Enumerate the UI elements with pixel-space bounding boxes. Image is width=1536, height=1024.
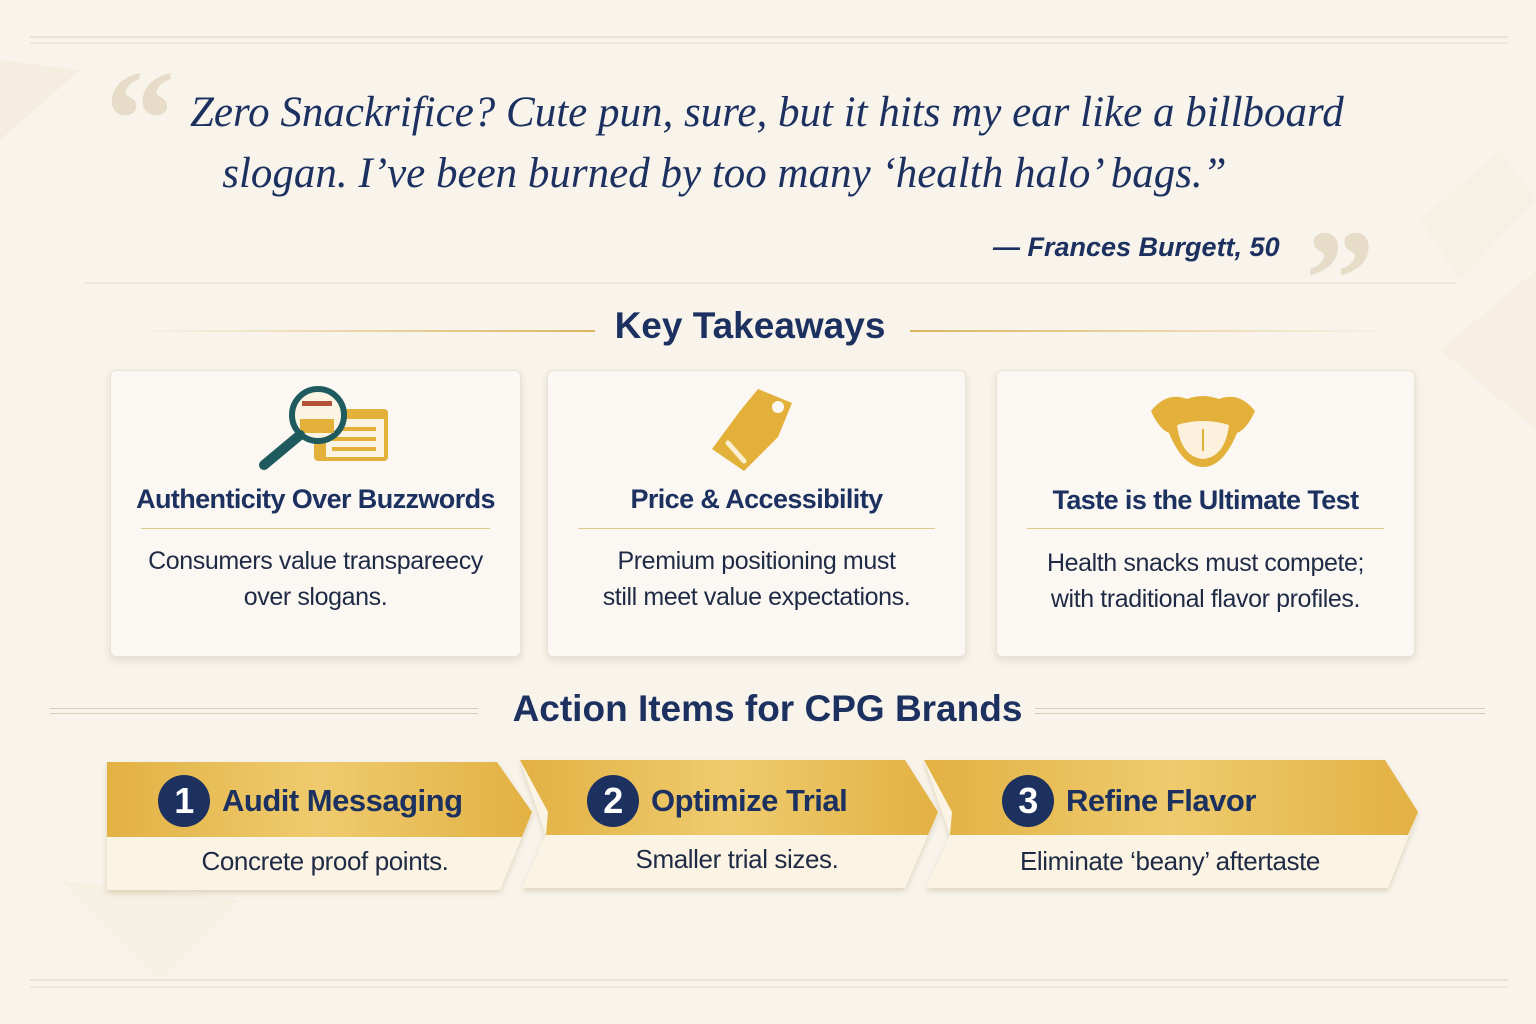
action 3: Refine Flavor: [1066, 783, 1256, 818]
heading: Key Takeaways: Key Takeaways: [615, 305, 885, 346]
heading: Action Items for CPG Brands: Action Items for CPG Brands: [513, 688, 1022, 729]
attribution: — Frances Burgett, 50: [993, 232, 1280, 262]
panel: Price & Accessibility: still meet value expectations.: [603, 583, 910, 611]
action 2: [587, 775, 847, 827]
quote text: Zero Snackrifice? Cute pun, sure, but it hits my ear like a billboard: [190, 89, 1344, 136]
quote text: slogan. I’ve been burned by too many ‘health halo’ bags.”: [222, 150, 1227, 197]
panel: Authenticity Over Buzzwords: Authenticity Over Buzzwords: [136, 484, 495, 514]
icon: magnifier over document: [259, 386, 388, 470]
icon: mouth with tongue: [1151, 396, 1255, 467]
panel: Price & Accessibility: [547, 370, 966, 657]
panel: Price & Accessibility: Premium positioning must: [617, 547, 896, 575]
action 3: [1002, 775, 1256, 827]
action arrows: Smaller trial sizes.: [636, 844, 838, 874]
panel: Taste is the Ultimate Test: Health snacks must compete;: [1047, 549, 1364, 577]
icon: price tag: [712, 389, 792, 471]
panel: Taste is the Ultimate Test: Taste is the Ultimate Test: [1052, 485, 1358, 515]
panel: Authenticity Over Buzzwords: Consumers value transpareecy: [148, 547, 483, 575]
panel: Authenticity Over Buzzwords: [110, 370, 521, 657]
action 3: 3: [1018, 780, 1038, 821]
quote block: [105, 42, 1375, 357]
action 2: Optimize Trial: [651, 783, 847, 818]
icon: open quote mark: “: [105, 42, 175, 197]
panel: Taste is the Ultimate Test: with traditional flavor profiles.: [1051, 585, 1360, 613]
icon: close quote mark: ”: [1305, 202, 1375, 357]
action arrows: Concrete proof points.: [201, 846, 448, 876]
panel: Authenticity Over Buzzwords: over slogans.: [244, 583, 387, 611]
action 1: 1: [174, 780, 194, 821]
action arrows: [104, 760, 1420, 896]
panel: Taste is the Ultimate Test: [996, 370, 1415, 657]
action 1: Audit Messaging: [222, 783, 463, 818]
action arrows: Eliminate ‘beany’ aftertaste: [1020, 846, 1320, 876]
action 1: [158, 775, 463, 827]
quote text: [190, 89, 1344, 197]
panel: Price & Accessibility: Price & Accessibility: [630, 484, 883, 514]
action 2: 2: [603, 780, 623, 821]
